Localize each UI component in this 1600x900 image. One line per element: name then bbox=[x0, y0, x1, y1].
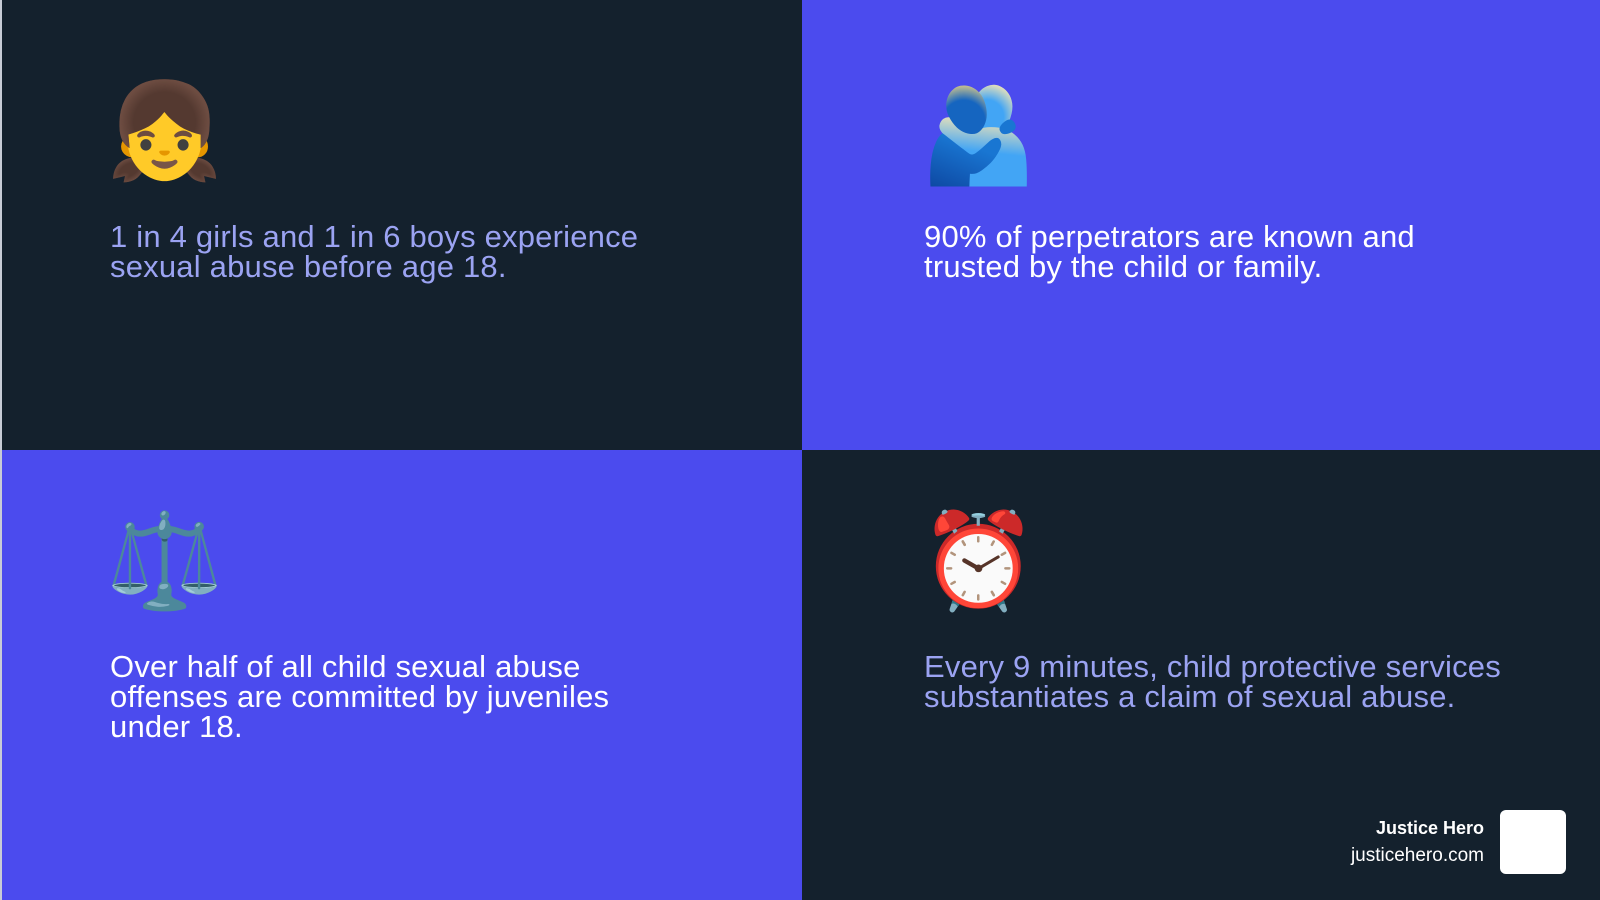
panel: girls and boys bbox=[0, 0, 802, 450]
brand text: justicehero.com bbox=[1351, 845, 1484, 866]
panel: every 9 minutes bbox=[802, 450, 1600, 900]
brand text: Justice Hero bbox=[1376, 818, 1484, 838]
panel: perpetrators bbox=[802, 0, 1600, 450]
footer: brand bbox=[1350, 810, 1566, 874]
text: every 9 minutes: Every 9 minutes, child protective services substantiates a claim of sexual abuse. bbox=[924, 649, 1501, 714]
icon: hugging people: 🫂 bbox=[920, 80, 1037, 190]
text: juveniles: Over half of all child sexual abuse offenses are committed by juveniles under 18. bbox=[110, 649, 609, 744]
logo box bbox=[1500, 810, 1566, 874]
panel: juveniles bbox=[0, 450, 802, 900]
icon: girl: 👧 bbox=[106, 76, 223, 186]
icon: scales: ⚖️ bbox=[106, 506, 223, 616]
text: 1 in 4 girls: 1 in 4 girls and 1 in 6 boys experience sexual abuse before age 18. bbox=[110, 219, 638, 284]
brand text bbox=[1350, 818, 1484, 866]
icon: alarm clock: ⏰ bbox=[920, 506, 1037, 616]
text: perpetrators: 90% of perpetrators are known and trusted by the child or family. bbox=[924, 219, 1415, 284]
